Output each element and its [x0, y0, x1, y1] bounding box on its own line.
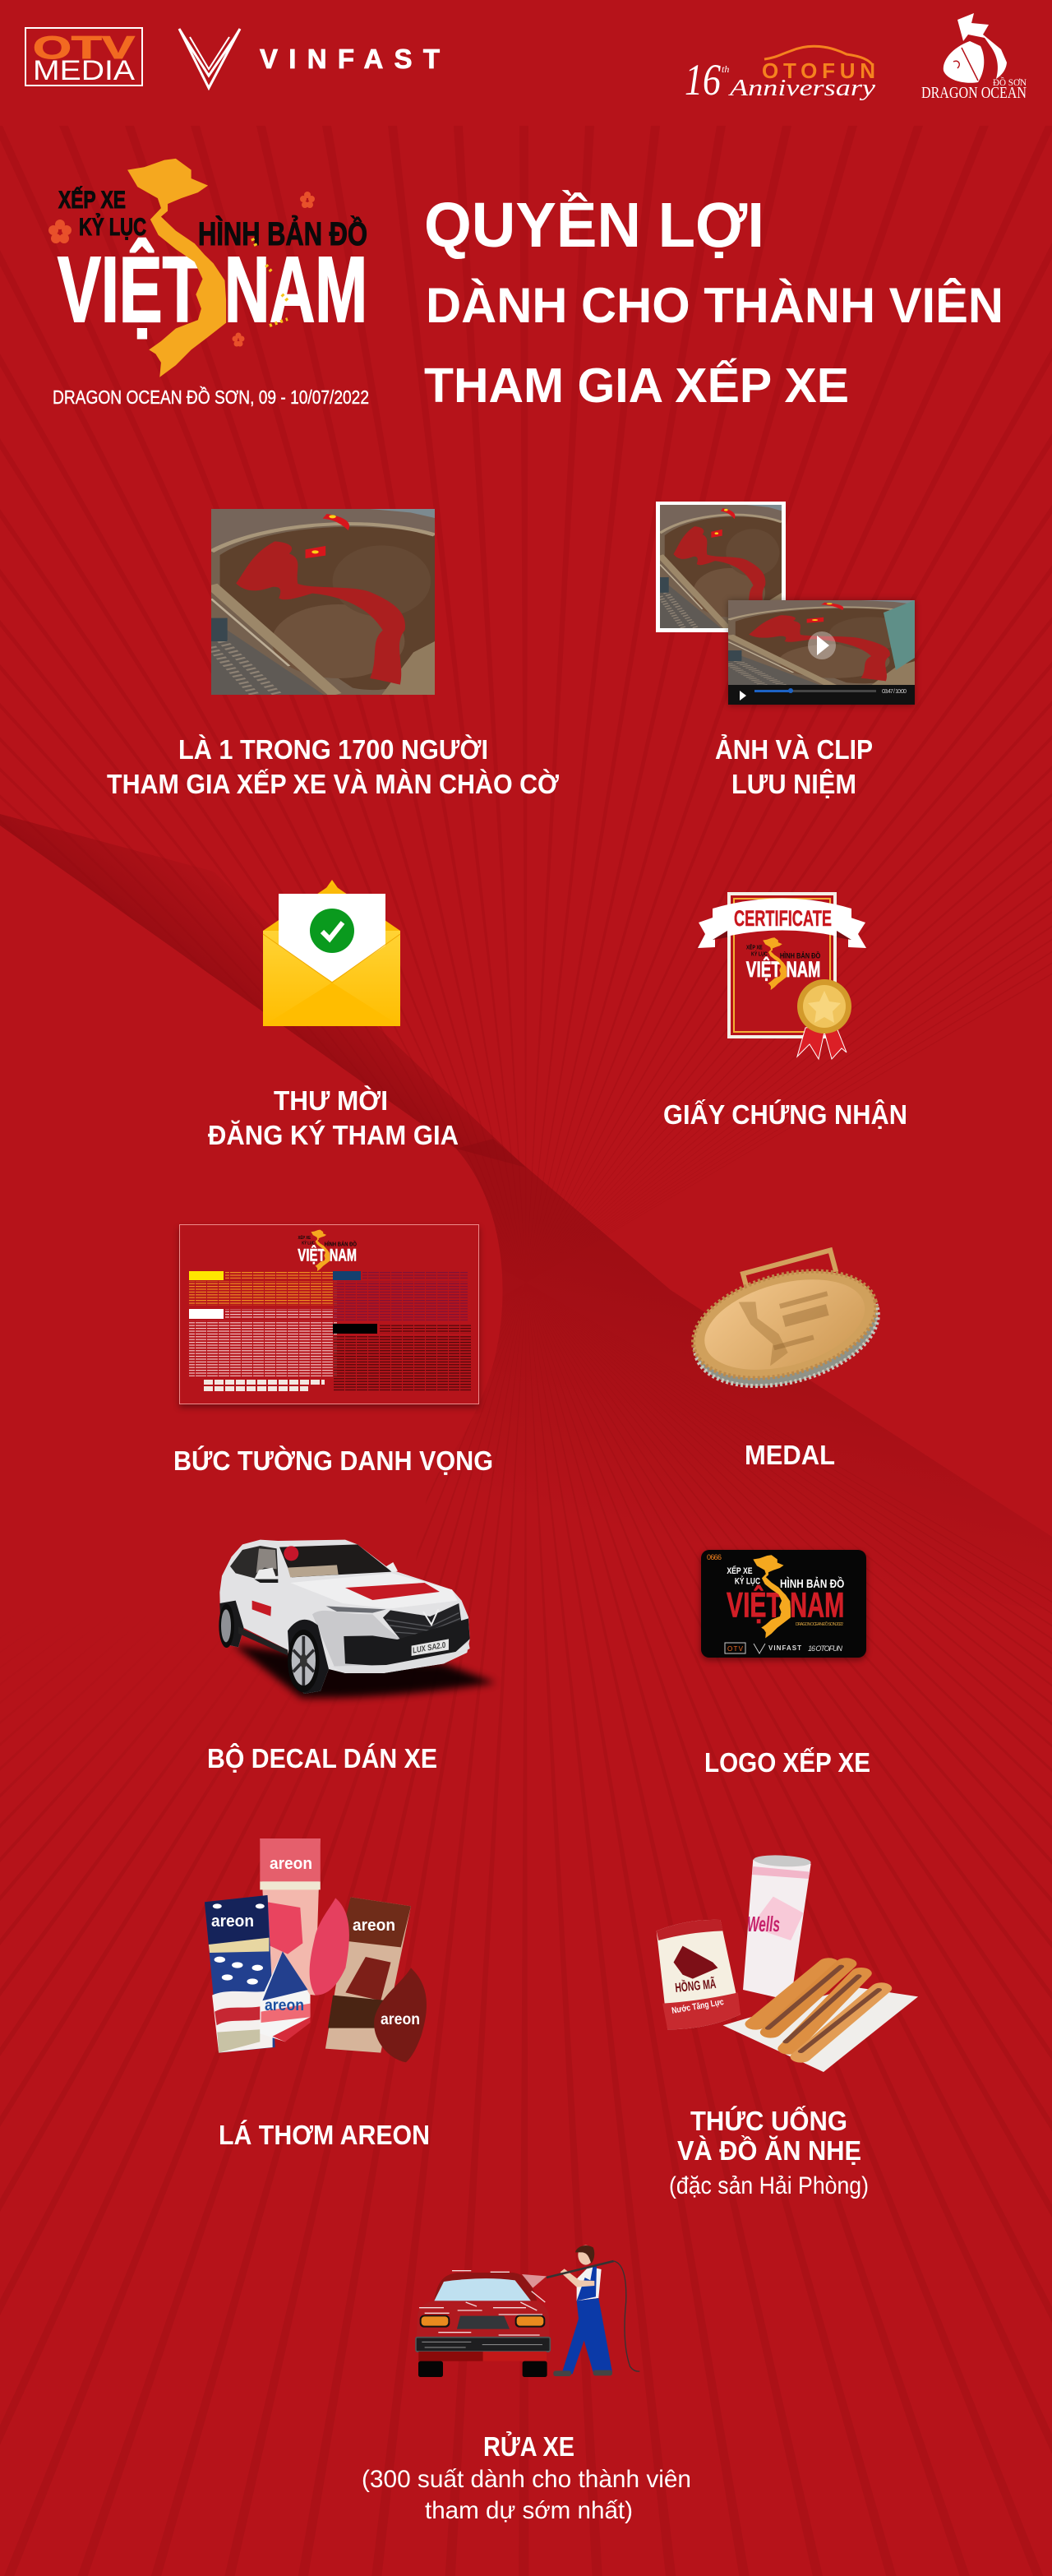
caption: GIẤY CHỨNG NHẬN [663, 1099, 907, 1130]
blue name list [333, 1271, 468, 1320]
mini logo [298, 1230, 357, 1271]
photo print [656, 502, 786, 632]
panel: wall of fame [173, 1225, 493, 1476]
air fresheners: areon [265, 1997, 304, 2014]
black card [701, 1550, 866, 1660]
logo: Otofun 16th anniversary [685, 46, 876, 104]
panel: certificate [663, 894, 907, 1130]
mini logo: HÌNH BẢN ĐỒ [325, 1240, 357, 1248]
card logo [727, 1555, 844, 1638]
event logo: XẾP XE [58, 186, 126, 214]
logo: OTV Media: MEDIA [33, 55, 135, 86]
caption: (300 suất dành cho thành viên [362, 2466, 691, 2493]
car: LUX SA2.0 [412, 1641, 447, 1656]
logo: Dragon Ocean: DRAGON OCEAN [921, 84, 1027, 102]
logo caption: DRAGON OCEAN ĐỒ SƠN, 09 - 10/07/2022 [53, 386, 369, 408]
white name list [189, 1309, 337, 1376]
black card: 16 OTOFUN [808, 1644, 843, 1653]
caption: ẢNH VÀ CLIP [715, 734, 873, 765]
caption: THAM GIA XẾP XE VÀ MÀN CHÀO CỜ [107, 769, 560, 799]
caption: VÀ ĐỒ ĂN NHẸ [677, 2135, 861, 2166]
mini logo: HÌNH BẢN ĐỒ [780, 951, 821, 961]
certificate [698, 894, 866, 1059]
black card: VINFAST [768, 1644, 801, 1652]
caption: (đặc sản Hải Phòng) [669, 2172, 869, 2199]
car [416, 2271, 550, 2377]
air fresheners: areon [211, 1912, 254, 1931]
mini logo: VIỆT [746, 956, 781, 982]
caption: LƯU NIỆM [731, 769, 856, 799]
title: THAM GIA XẾP XE [424, 358, 849, 413]
mini logo [746, 937, 821, 990]
caption: RỬA XE [483, 2431, 574, 2462]
mini logo: XẾP XE [746, 943, 763, 951]
panel: car wash [362, 2245, 691, 2524]
video player [728, 600, 915, 705]
black name list [333, 1324, 471, 1392]
ribbon [797, 1024, 847, 1059]
black card: DRAGON OCEAN ĐỒ SƠN 2022 [796, 1621, 843, 1627]
caption: BỘ DECAL DÁN XE [207, 1742, 437, 1774]
caption: LOGO XẾP XE [704, 1747, 870, 1778]
logo: Otofun 16th anniversary: OTOFUN [762, 58, 875, 83]
mini logo: VIỆT [298, 1244, 325, 1265]
check mark [310, 909, 354, 953]
sponsors [204, 1382, 325, 1389]
logo: Dragon Ocean: ĐỒ SƠN [993, 76, 1027, 88]
logo: Otofun 16th anniversary: Anniversary [727, 76, 876, 101]
card logo: VIỆT [727, 1585, 782, 1626]
car [219, 1540, 496, 1698]
yellow name list [189, 1271, 337, 1306]
food and drinks [657, 1854, 918, 2072]
caption: ĐĂNG KÝ THAM GIA [208, 1120, 459, 1150]
certificate: CERTIFICATE [734, 906, 832, 931]
mini logo: KỶ LỤC [302, 1240, 315, 1246]
caption: BỨC TƯỜNG DANH VỌNG [173, 1445, 493, 1476]
caption: MEDAL [745, 1440, 835, 1470]
card logo: HÌNH BẢN ĐỒ [780, 1576, 844, 1591]
caption: THƯ MỜI [274, 1085, 388, 1116]
car wash illustration [416, 2245, 639, 2377]
mini logo: NAM [330, 1245, 357, 1265]
caption [362, 2431, 691, 2524]
mini logo: XẾP XE [298, 1235, 311, 1241]
event logo: NAM [224, 238, 367, 341]
worker [522, 2245, 639, 2376]
mini logo: KỶ LỤC [751, 950, 768, 958]
caption: LÁ THƠM AREON [219, 2120, 430, 2150]
panel: logo card [701, 1550, 870, 1778]
panel: decal [207, 1540, 496, 1774]
card logo: XẾP XE [727, 1565, 753, 1576]
panel: photo and clip [656, 502, 915, 799]
mini logo: NAM [787, 956, 820, 982]
food and drinks: HỒNG MÃ [674, 1975, 717, 1996]
caption [107, 734, 560, 799]
panel: areon [205, 1838, 430, 2150]
caption: THỨC UỐNG [690, 2105, 847, 2136]
panel: medal [679, 1242, 890, 1470]
event logo: KỶ LỤC [79, 213, 146, 241]
icon: envelope [263, 880, 400, 1026]
event logo: HÌNH BẢN ĐỒ [198, 215, 367, 252]
medal [679, 1242, 890, 1404]
black card: 0666 [707, 1553, 722, 1561]
event logo [48, 159, 369, 408]
logo: Otofun 16th anniversary: 16 [685, 55, 721, 104]
caption: tham dự sớm nhất) [425, 2497, 633, 2524]
air fresheners [205, 1838, 427, 2062]
title: DÀNH CHO THÀNH VIÊN [426, 278, 1004, 333]
title [424, 189, 1004, 413]
header logos [25, 13, 1027, 104]
logo: VinFast [179, 29, 440, 88]
air fresheners: areon [381, 2011, 420, 2028]
food and drinks: Nước Tăng Lực [671, 1997, 725, 2016]
video player: 03:47 / 10:00 [882, 689, 907, 695]
seal [797, 979, 851, 1034]
panel: drinks and snacks [657, 1854, 918, 2199]
card logo: KỶ LỤC [735, 1576, 760, 1587]
card logo: NAM [790, 1586, 844, 1626]
caption: LÀ 1 TRONG 1700 NGƯỜI [178, 734, 488, 765]
air fresheners: areon [353, 1917, 395, 1935]
caption [208, 1085, 459, 1150]
logo: VinFast: VINFAST [260, 44, 440, 74]
air fresheners: areon [270, 1855, 312, 1873]
logo: OTV Media [25, 28, 142, 86]
caption [715, 734, 873, 799]
black card: OTV [727, 1645, 744, 1653]
aerial photo [211, 509, 435, 695]
logo: Otofun 16th anniversary: th [722, 63, 729, 75]
panel: 1700 participants [107, 509, 560, 799]
wall board [179, 1225, 479, 1408]
title: QUYỀN LỢI [424, 189, 764, 261]
food and drinks: Wells [747, 1912, 780, 1936]
panel: invitation [208, 880, 459, 1150]
logo: OTV Media: OTV [33, 30, 135, 66]
caption [669, 2105, 869, 2199]
event logo: VIỆT [58, 238, 202, 341]
logo: Dragon Ocean [921, 13, 1027, 102]
